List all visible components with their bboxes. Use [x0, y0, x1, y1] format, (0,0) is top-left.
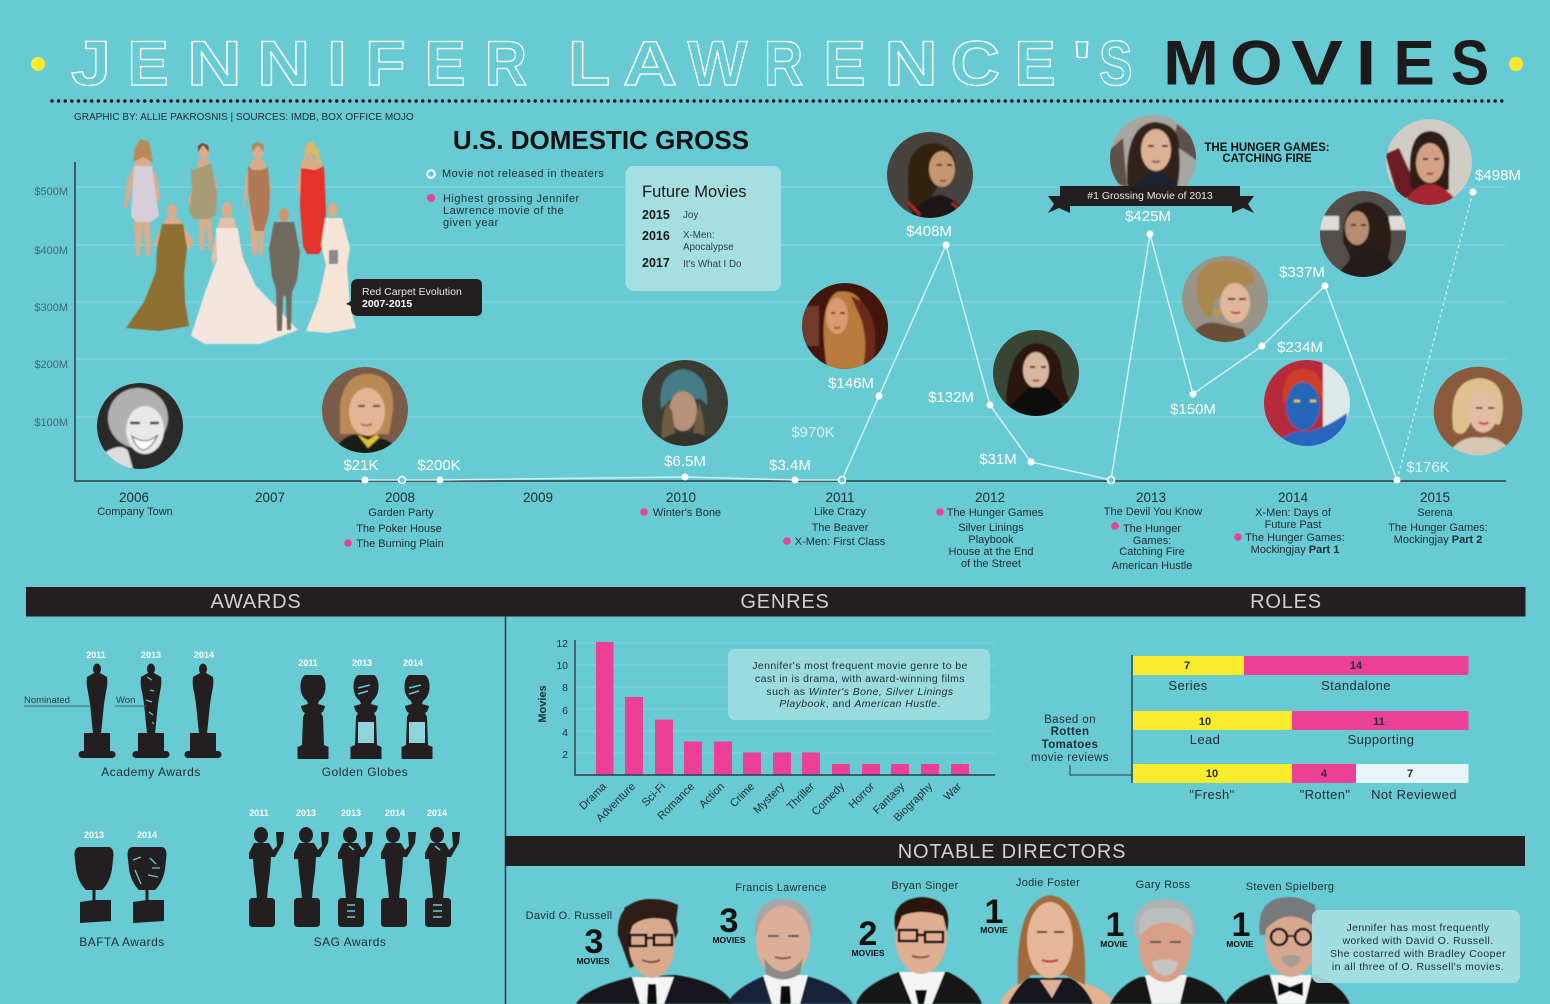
Academy Awards: 2011: [86, 650, 106, 660]
Academy Awards: Academy Awards: [101, 765, 201, 779]
genre labels: Fantasy: [871, 780, 907, 817]
2012: Playbook: [968, 534, 1014, 546]
title: bold word: S: [1451, 28, 1489, 98]
title: outlined words: C: [951, 29, 1000, 99]
2014: X-Men: Days of: [1255, 507, 1332, 519]
value labels: $31M: [979, 451, 1017, 468]
value labels: $408M: [906, 223, 952, 240]
value labels: $425M: [1125, 208, 1171, 225]
callout: red carpet evolution: 2007-2015: [362, 298, 412, 310]
future movies list: [642, 208, 742, 270]
Golden Globes: [298, 658, 432, 779]
bar: series vs standalone: Series: [1168, 678, 1208, 693]
2013: [1104, 490, 1202, 572]
SAG Awards: [249, 808, 460, 949]
bar: series vs standalone: 14: [1350, 660, 1363, 672]
portrait: The Hunger Games: [887, 132, 973, 218]
director: David O. Russell: 3: [585, 923, 603, 961]
director: David O. Russell: MOVIES: [576, 956, 610, 966]
value labels: $176K: [1406, 459, 1450, 476]
title: bold word: I: [1356, 28, 1376, 98]
2013: The Hunger: [1123, 523, 1181, 535]
genre labels: [577, 780, 964, 825]
note: based on rotten tomatoes: Tomatoes: [1042, 739, 1098, 751]
2015: [1388, 490, 1488, 546]
value labels: $970K: [791, 424, 835, 441]
director: David O. Russell: [526, 899, 733, 1004]
director: Bryan Singer: Bryan Singer: [891, 880, 959, 892]
bar: lead vs supporting: Lead: [1190, 732, 1220, 747]
2006: [97, 490, 173, 518]
director: David O. Russell: David O. Russell: [526, 910, 612, 922]
bar: rotten tomatoes reviews: "Fresh": [1189, 787, 1235, 802]
genre labels: Sci-Fi: [640, 781, 668, 809]
genre labels: Drama: [577, 780, 610, 812]
2011: Like Crazy: [814, 506, 866, 518]
director: Steven Spielberg: Steven Spielberg: [1246, 881, 1334, 893]
Academy Awards: 2013: [141, 650, 161, 660]
2011: X-Men: First Class: [795, 536, 886, 548]
portrait: Catching Fire: [1110, 115, 1196, 186]
portrait: Company Town: [97, 383, 183, 469]
2008: Garden Party: [368, 507, 434, 519]
directors callout: Jennifer has most frequently: [1346, 922, 1490, 934]
2014: Mockingjay Part 1: [1251, 544, 1339, 556]
heading: genres: GENRES: [740, 591, 830, 613]
title: outlined words: E: [128, 29, 169, 99]
section bar: awards, genres, roles: [26, 587, 1526, 616]
callout: The Hunger Games: Catching Fire: CATCHING FIRE: [1222, 153, 1312, 165]
bar: lead vs supporting: [1133, 711, 1468, 747]
genres callout: Playbook, and American Hustle.: [779, 698, 941, 710]
SAG Awards: 2014: [427, 808, 447, 818]
note: based on rotten tomatoes: [1031, 714, 1132, 775]
2007: 2007: [255, 490, 285, 505]
legend: highest grossing text: Lawrence movie of the: [443, 205, 564, 217]
y axis: [556, 638, 568, 761]
title: bold word: M: [1163, 28, 1219, 98]
section bar: notable directors: NOTABLE DIRECTORS: [898, 841, 1126, 863]
legend: highest grossing text: given year: [443, 217, 499, 229]
BAFTA Awards: 2013: [84, 830, 104, 840]
title: outlined words: E: [823, 29, 866, 99]
future movies list: 2015: [642, 208, 670, 222]
directors callout: She costarred with Bradley Cooper: [1330, 948, 1506, 960]
portrait: American Hustle: [1182, 256, 1268, 342]
value labels: $146M: [828, 375, 874, 392]
legend: highest grossing text: Highest grossing Jennifer: [443, 193, 580, 205]
2008: The Burning Plain: [356, 538, 444, 550]
2011: 2011: [825, 490, 855, 505]
2010: [640, 490, 721, 519]
timeline: years and movies: [97, 490, 1488, 572]
future movies list: 2017: [642, 256, 670, 270]
2013: American Hustle: [1112, 560, 1192, 572]
director: Gary Ross: Gary Ross: [1136, 879, 1191, 891]
2015: The Hunger Games:: [1388, 522, 1488, 534]
future movies list: Joy: [683, 210, 698, 221]
axes: [575, 640, 995, 775]
title: outlined words: N: [187, 29, 242, 99]
genre labels: Biography: [892, 780, 935, 824]
2012: Silver Linings: [958, 522, 1024, 534]
credit line: GRAPHIC BY: ALLIE PAKROSNIS | SOURCES: IMDB, BOX OFFICE MOJO: [74, 112, 414, 123]
2008: 2008: [385, 490, 415, 505]
genre labels: Crime: [728, 781, 757, 810]
SAG Awards: 2013: [296, 808, 316, 818]
director: Bryan Singer: [851, 880, 982, 1004]
2010: Winter's Bone: [653, 507, 721, 519]
future movies list: Apocalypse: [683, 242, 734, 253]
panel: genres bar chart: [537, 638, 995, 825]
data line: [365, 234, 1397, 480]
2014: The Hunger Games:: [1245, 532, 1345, 544]
2011: The Beaver: [812, 522, 869, 534]
title: outlined words: R: [764, 29, 803, 99]
y axis labels: $200M: [34, 359, 68, 371]
title: outlined words: E: [1014, 29, 1056, 99]
2012: House at the End: [948, 546, 1034, 558]
y axis: 8: [562, 682, 568, 694]
genres callout: such as Winter's Bone, Silver Linings: [766, 686, 954, 698]
value labels: $498M: [1475, 167, 1521, 184]
future movies heading: Future Movies: [642, 183, 747, 201]
2008: [344, 490, 444, 550]
genres callout: cast in is drama, with award-winning films: [755, 673, 965, 685]
panel: awards: [24, 650, 460, 949]
director: Francis Lawrence: Francis Lawrence: [735, 882, 827, 894]
title: outlined words: E: [424, 29, 466, 99]
2010: 2010: [666, 490, 696, 505]
director: Bryan Singer: 2: [859, 915, 877, 953]
genre labels: War: [942, 780, 964, 803]
genre labels: Action: [697, 781, 727, 811]
decorative yellow dot right: [1509, 57, 1523, 71]
legend: pink dot: [427, 194, 435, 202]
bar: rotten tomatoes reviews: 10: [1206, 768, 1218, 780]
Academy Awards: Won: [116, 695, 135, 706]
2006: Company Town: [97, 506, 173, 518]
bar: lead vs supporting: 10: [1199, 716, 1211, 728]
y axis: 12: [556, 638, 568, 650]
genre labels: Comedy: [810, 780, 847, 818]
decorative yellow dot left: [31, 57, 45, 71]
director: Jodie Foster: MOVIE: [980, 925, 1008, 935]
portrait: X-Men Mystique: [1264, 360, 1350, 446]
2014: Future Past: [1265, 519, 1321, 531]
value labels: $337M: [1279, 264, 1325, 281]
Golden Globes: 2011: [298, 658, 318, 668]
bars: [596, 642, 969, 775]
y axis labels: $500M: [34, 186, 68, 198]
directors callout: [1312, 910, 1520, 983]
callout: The Hunger Games: Catching Fire: THE HUNGER GAMES:: [1204, 142, 1330, 154]
title: outlined words: ': [1072, 29, 1092, 99]
SAG Awards: 2014: [385, 808, 405, 818]
value labels: $150M: [1170, 401, 1216, 418]
y axis: 6: [562, 705, 568, 717]
chart heading: U.S. DOMESTIC GROSS: [453, 125, 749, 155]
portrait: Mockingjay Part 1: [1320, 191, 1406, 277]
director: Steven Spielberg: MOVIE: [1226, 939, 1254, 949]
bar: rotten tomatoes reviews: 4: [1321, 768, 1328, 780]
bar: lead vs supporting: Supporting: [1348, 732, 1414, 747]
value labels: $21K: [343, 457, 379, 474]
2013: Games:: [1133, 535, 1171, 547]
title: bold word: E: [1394, 28, 1435, 98]
future movies list: 2016: [642, 229, 670, 243]
legend: open circle: [427, 170, 435, 178]
bar: rotten tomatoes reviews: "Rotten": [1300, 787, 1350, 802]
portrait: Silver Linings Playbook: [993, 330, 1079, 416]
2015: Mockingjay Part 2: [1394, 534, 1482, 546]
title: outlined words: J: [71, 29, 111, 99]
legend: [427, 168, 604, 229]
section bar: notable directors: [505, 836, 1525, 866]
y axis labels: [34, 186, 68, 429]
director: Francis Lawrence: 3: [720, 902, 738, 940]
bar: rotten tomatoes reviews: Not Reviewed: [1371, 787, 1457, 802]
y axis title: Movies: [537, 685, 549, 723]
2014: 2014: [1278, 490, 1309, 505]
portrait: Mockingjay Part 2: [1386, 119, 1472, 205]
title: outlined words: W: [688, 29, 748, 99]
Golden Globes: Golden Globes: [322, 765, 408, 779]
photo group: red carpet dresses: [124, 139, 356, 344]
y axis labels: $100M: [34, 417, 68, 429]
director: Jodie Foster: [980, 877, 1115, 1004]
axis: [1131, 655, 1133, 783]
bar: series vs standalone: 7: [1184, 660, 1190, 672]
value labels: $3.4M: [769, 457, 811, 474]
directors callout: worked with David O. Russell.: [1341, 935, 1494, 947]
title: outlined words: F: [365, 29, 406, 99]
bar: rotten tomatoes reviews: 7: [1407, 768, 1413, 780]
panel: roles stacked bars: [1031, 655, 1468, 802]
2008: The Poker House: [356, 523, 442, 535]
heading: awards: AWARDS: [210, 591, 302, 613]
BAFTA Awards: BAFTA Awards: [79, 935, 165, 949]
2012: of the Street: [961, 558, 1021, 570]
ribbon: #1 grossing movie of 2013: #1 Grossing Movie of 2013: [1087, 190, 1213, 202]
title: outlined words: R: [485, 29, 527, 99]
2013: 2013: [1136, 490, 1166, 505]
y axis: 4: [562, 727, 568, 739]
BAFTA Awards: 2014: [137, 830, 157, 840]
director: Gary Ross: MOVIE: [1100, 939, 1128, 949]
SAG Awards: 2013: [341, 808, 361, 818]
2006: 2006: [119, 490, 149, 505]
director: Gary Ross: [1100, 879, 1226, 1004]
2015: Serena: [1417, 507, 1454, 519]
title: outlined words: S: [1099, 29, 1132, 99]
portrait: Garden Party: [322, 367, 408, 453]
value labels: $200K: [417, 457, 461, 474]
2012: [936, 490, 1044, 570]
2014: [1234, 490, 1345, 556]
title: outlined words: A: [623, 29, 677, 99]
title: bold word: V: [1291, 28, 1343, 98]
director: Steven Spielberg: 1: [1232, 906, 1250, 944]
callout: red carpet evolution: Red Carpet Evolution: [362, 286, 462, 298]
director: Steven Spielberg: [1225, 881, 1350, 1004]
grid lines: [576, 643, 995, 753]
2013: Catching Fire: [1119, 546, 1185, 558]
genre labels: Mystery: [751, 780, 787, 816]
genres callout: Jennifer's most frequent movie genre to be: [752, 660, 968, 672]
value labels: $132M: [928, 389, 974, 406]
BAFTA Awards: [74, 830, 166, 949]
genres callout: [728, 649, 990, 720]
y axis labels: $400M: [34, 245, 68, 257]
2012: 2012: [975, 490, 1005, 505]
2013: The Devil You Know: [1104, 506, 1202, 518]
genre labels: Thriller: [785, 780, 817, 813]
line chart: domestic gross: [34, 162, 1521, 484]
SAG Awards: 2011: [249, 808, 269, 818]
genre labels: Romance: [655, 781, 697, 822]
2009: 2009: [523, 490, 553, 505]
Academy Awards: Nominated: [24, 695, 70, 706]
y axis: 2: [562, 749, 568, 761]
genre labels: Horror: [847, 780, 877, 811]
note: based on rotten tomatoes: movie reviews: [1031, 752, 1109, 764]
note: based on rotten tomatoes: Rotten: [1051, 726, 1089, 738]
future movies list: X-Men:: [683, 230, 715, 241]
director: Gary Ross: 1: [1106, 906, 1124, 944]
title: bold word: O: [1230, 28, 1283, 98]
panel: future movies: [626, 166, 781, 291]
legend: not released text: Movie not released in theaters: [442, 168, 604, 180]
ribbon: #1 grossing movie of 2013: [1048, 186, 1254, 213]
portrait: Serena: [1434, 366, 1522, 456]
director: Bryan Singer: MOVIES: [851, 948, 885, 958]
portrait: Like Crazy: [802, 283, 888, 369]
bar: rotten tomatoes reviews: [1133, 764, 1468, 802]
2012: The Hunger Games: [947, 507, 1044, 519]
title: outlined words: N: [257, 29, 310, 99]
bar: series vs standalone: [1133, 656, 1468, 693]
portrait: Winter's Bone: [642, 360, 728, 446]
Golden Globes: 2014: [403, 658, 423, 668]
callout: red carpet evolution: [346, 279, 482, 316]
axes: [75, 162, 1506, 481]
2011: [783, 490, 886, 548]
title: outlined words: L: [568, 29, 610, 99]
note: based on rotten tomatoes: Based on: [1044, 714, 1096, 726]
data points: [362, 188, 1476, 484]
y axis: 10: [556, 660, 568, 672]
director: Francis Lawrence: [712, 882, 853, 1004]
title: outlined words: N: [884, 29, 938, 99]
Golden Globes: 2013: [352, 658, 372, 668]
heading: roles: ROLES: [1250, 591, 1322, 613]
projected dashed segment: [1397, 192, 1473, 480]
director: Jodie Foster: 1: [985, 893, 1003, 931]
Academy Awards: 2014: [194, 650, 214, 660]
title: outlined words: I: [327, 29, 347, 99]
genre labels: Adventure: [594, 781, 638, 825]
value labels: [343, 167, 1521, 476]
director: Jodie Foster: Jodie Foster: [1016, 877, 1080, 889]
directors callout: in all three of O. Russell's movies.: [1332, 961, 1504, 973]
director: Francis Lawrence: MOVIES: [712, 935, 746, 945]
future movies list: It's What I Do: [683, 259, 742, 270]
SAG Awards: SAG Awards: [314, 935, 386, 949]
value labels: $234M: [1277, 339, 1323, 356]
open data points: not released in theaters: [398, 476, 1114, 484]
bar: lead vs supporting: 11: [1373, 716, 1385, 728]
Academy Awards: [24, 650, 222, 779]
y axis labels: $300M: [34, 302, 68, 314]
value labels: $6.5M: [664, 453, 706, 470]
2015: 2015: [1420, 490, 1450, 505]
bar: series vs standalone: Standalone: [1321, 678, 1391, 693]
